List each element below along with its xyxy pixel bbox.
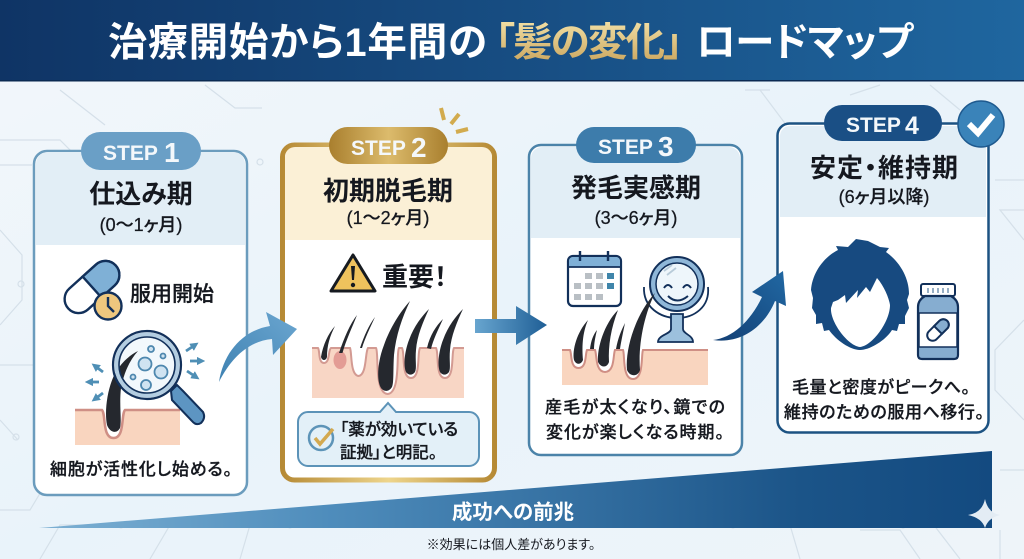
panel: step 4 <box>778 101 1004 432</box>
step 4 period: (6ヶ月以降) <box>839 187 929 207</box>
step 1 caption: 細胞が活性化し始める。 <box>50 459 232 479</box>
title band <box>0 0 1024 82</box>
step 2 pill: 2 <box>411 132 427 163</box>
panel: step 3 <box>529 127 742 455</box>
icon: calendar <box>568 251 621 306</box>
badge: check <box>958 101 1004 147</box>
title text: 治療開始から1年間の <box>108 21 487 65</box>
title text: 「髪の変化」 <box>495 21 683 65</box>
icon: warning <box>331 255 375 291</box>
icon: check <box>309 426 333 450</box>
illustration: growing hair <box>562 293 708 385</box>
illustration: hair follicles <box>312 301 464 398</box>
arrow: step 1 to 2 <box>219 312 297 382</box>
label: start medication: 服用開始 <box>130 283 214 306</box>
step 3 caption: 産毛が太くなり、鏡での <box>545 397 725 417</box>
step 1 heading: 仕込み期 <box>89 179 193 209</box>
step 4 heading: 安定・維持期 <box>810 153 958 183</box>
panel: step 2 <box>219 101 1004 480</box>
footnote: ※効果には個人差があります。 <box>427 537 595 552</box>
step 1 pill <box>81 132 201 170</box>
arrow: step 2 to 3 <box>475 306 547 345</box>
rays <box>441 108 468 132</box>
step 1 pill: 1 <box>164 137 180 168</box>
step 3 heading: 発毛実感期 <box>571 173 701 203</box>
callout text: 証拠」と明記。 <box>340 443 437 462</box>
callout: proof note <box>298 403 479 466</box>
icon: head with full hair <box>811 239 909 350</box>
label: important: 重要！ <box>382 262 447 292</box>
title text <box>108 21 914 65</box>
step 1 pill: STEP <box>103 142 158 165</box>
panel: step 4: 維持のための服用へ移行。 <box>784 403 984 422</box>
step 3 pill: STEP <box>598 136 653 159</box>
step 2 period: (1〜2ヶ月) <box>347 208 429 228</box>
arrow: step 3 to 4 <box>713 271 786 341</box>
step 2 pill: STEP <box>351 137 406 160</box>
panel: step 3: 変化が楽しくなる時期。 <box>546 422 724 442</box>
step 1 period: (0〜1ヶ月) <box>100 215 182 235</box>
sparkle <box>968 499 1000 528</box>
step 3 pill <box>576 127 696 163</box>
icon: capsule and clock <box>59 255 125 320</box>
ribbon label: 成功への前兆 <box>452 500 574 524</box>
step 4 pill: STEP <box>846 114 901 137</box>
step 4 pill <box>824 105 942 141</box>
step 4 pill: 4 <box>905 112 919 140</box>
step 4 caption: 毛量と密度がピークへ。 <box>792 377 970 397</box>
title text: ロードマップ <box>696 21 914 65</box>
icon: pill bottle <box>918 284 958 359</box>
step 2 pill <box>329 127 448 164</box>
step 3 period: (3〜6ヶ月) <box>595 208 677 228</box>
callout text <box>340 419 458 462</box>
step 3 pill: 3 <box>658 131 674 162</box>
success ribbon <box>39 451 1000 528</box>
callout text: 「薬が効いている <box>340 419 458 439</box>
icon: smiling mirror <box>644 257 708 342</box>
step 2 heading: 初期脱毛期 <box>323 176 453 206</box>
panel: step 1 <box>34 132 247 495</box>
illustration: magnified follicle <box>75 331 204 445</box>
